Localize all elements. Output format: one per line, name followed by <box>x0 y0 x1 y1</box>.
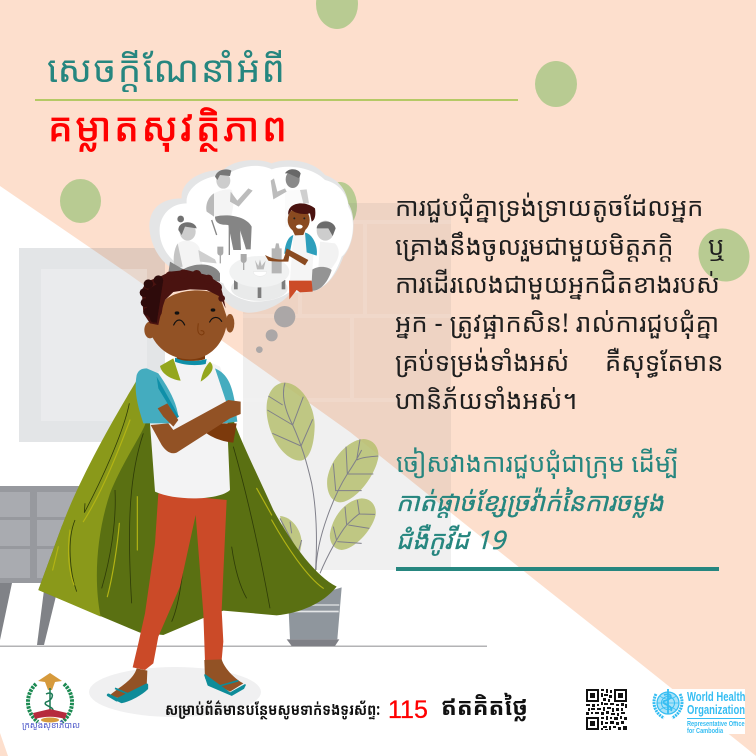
body line 2: គ្រោងនឹងចូលរួមជាមួយមិត្តភក្តិ <box>395 229 674 263</box>
body line 1: ការជួបជុំគ្នាទ្រង់ទ្រាយតូចដែលអ្នក <box>395 190 703 224</box>
body line 4: អ្នក - ត្រូវផ្អាកសិន! រាល់ការជួបជុំគ្នា <box>395 306 719 340</box>
WHO office <box>687 721 745 735</box>
wine glasses <box>217 247 223 263</box>
room: wall with bricks <box>243 203 451 570</box>
shirt <box>150 360 230 498</box>
hotline free: ឥតគិតថ្លៃ <box>441 690 528 723</box>
teal line 2: កាត់ផ្តាច់ខ្សែច្រវ៉ាក់នៃការចម្លង <box>396 485 664 519</box>
body line 5: គ្រប់ទម្រង់ទាំងអស់ <box>395 345 569 379</box>
thought bubble <box>149 160 354 353</box>
ministry name: ក្រសួងសុខាភិបាល <box>22 720 80 731</box>
body line 3: ការដើរលេងជាមួយអ្នកជិតខាងរបស់ <box>395 267 720 301</box>
body line 2 end: ឬ <box>708 229 725 263</box>
WHO name: World Health <box>687 690 745 704</box>
hair <box>140 269 226 325</box>
logo: Ministry of Health emblem <box>28 673 72 722</box>
emblem ceremonial top <box>38 673 62 690</box>
room: floor shadow <box>89 667 261 717</box>
room: floor line <box>0 646 487 647</box>
hotline number: 115 <box>388 696 428 724</box>
friends at table (gray) <box>168 169 339 301</box>
plant pot <box>287 587 342 646</box>
face <box>174 317 222 325</box>
white diagonal background <box>0 186 756 756</box>
emblem serpent staff <box>45 688 53 712</box>
white backing for WHO logo <box>652 689 745 734</box>
thought bubble dots <box>274 306 295 327</box>
hotline label: សម្រាប់ព័ត៌មានបន្ថែមសូមទាក់ទងទូរស័ព្ទ: <box>165 698 380 720</box>
WHO office: for Cambodia <box>687 728 723 735</box>
standing man <box>285 189 309 227</box>
body line 5 end: គឺសុទ្ធតែមាន <box>605 345 723 379</box>
WHO name <box>687 690 745 717</box>
sleeves <box>136 368 178 423</box>
emblem wreath <box>28 684 72 722</box>
title line 2: គម្លាតសុវត្ថិភាព <box>48 100 290 153</box>
sandals <box>108 685 147 702</box>
room: dresser <box>0 486 120 645</box>
WHO name: Organization <box>687 703 745 717</box>
arms <box>203 423 237 443</box>
QR code <box>586 689 627 730</box>
feet <box>110 668 147 700</box>
plant <box>267 383 378 573</box>
green decorative blobs <box>60 0 756 291</box>
emblem ribbon <box>33 709 67 719</box>
title divider <box>35 99 518 101</box>
WHO emblem <box>654 689 682 718</box>
main character with cape <box>38 269 337 702</box>
right gray friend <box>318 242 339 268</box>
collar <box>175 358 207 365</box>
legs <box>133 493 227 670</box>
seated man <box>213 189 234 218</box>
cape collar <box>160 358 181 381</box>
head <box>148 290 227 359</box>
WHO rule <box>687 718 745 719</box>
body paragraph <box>395 190 725 417</box>
body bottom rule <box>396 567 719 571</box>
room: window <box>19 248 165 442</box>
title line 1: សេចក្តីណែនាំអំពី <box>47 42 286 93</box>
teal line 3: ជំងឺកូវីដ 19 <box>396 523 505 557</box>
teal call to action <box>396 446 679 557</box>
teal line 1: ចៀសវាងការជួបជុំជាក្រុម ដើម្បី <box>396 446 679 480</box>
footer hotline <box>165 690 528 724</box>
WHO wordmark <box>687 690 745 735</box>
neck <box>177 350 205 361</box>
cape <box>38 382 337 635</box>
colored friend in thought bubble <box>265 203 317 299</box>
woman with wine <box>177 241 203 270</box>
body line 6: ហានិភ័យទាំងអស់។ <box>395 383 577 417</box>
WHO office: Representative Office <box>687 721 745 728</box>
